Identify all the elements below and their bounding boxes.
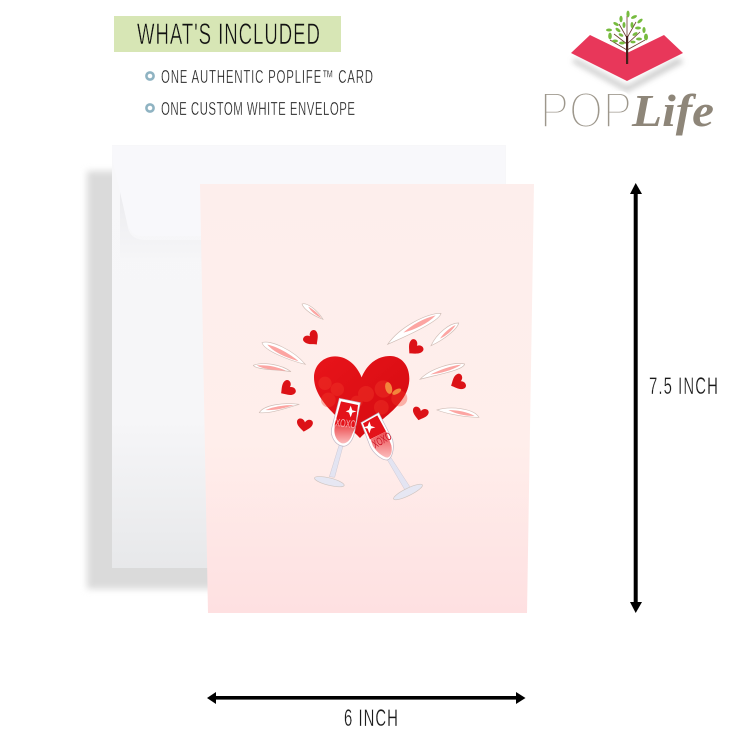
champagne glass left: XOXO <box>335 417 357 431</box>
champagne glass right <box>361 413 424 502</box>
logo tree <box>606 11 648 64</box>
streak highlights <box>257 307 475 416</box>
bullet list <box>146 67 373 120</box>
card <box>200 184 534 613</box>
label: height: 7.5 INCH <box>649 374 718 400</box>
small hearts <box>277 329 467 433</box>
card illustration <box>253 304 479 502</box>
arrow: height <box>630 183 642 613</box>
logo shadow <box>572 58 684 92</box>
bullet 1: ONE AUTHENTIC POPLIFE™ CARD <box>161 67 373 88</box>
arrow: width <box>207 692 526 704</box>
logo <box>540 11 714 139</box>
logo wordmark POP: POP <box>540 82 632 138</box>
champagne glass right: XOXO <box>371 431 394 451</box>
flap shadow <box>120 190 506 262</box>
envelope with shadow <box>87 145 506 589</box>
envelope shadow <box>87 171 387 589</box>
heart bokeh <box>318 377 407 415</box>
main heart <box>314 356 409 438</box>
envelope flap <box>112 146 505 236</box>
envelope body <box>112 145 506 568</box>
heading banner: WHAT'S INCLUDED <box>137 18 320 51</box>
bullet 2: ONE CUSTOM WHITE ENVELOPE <box>161 99 355 120</box>
logo wordmark Life: Life <box>631 85 714 136</box>
logo book <box>571 35 683 81</box>
champagne glass left <box>314 398 360 489</box>
label: width: 6 INCH <box>344 706 398 732</box>
streaks <box>253 304 479 417</box>
